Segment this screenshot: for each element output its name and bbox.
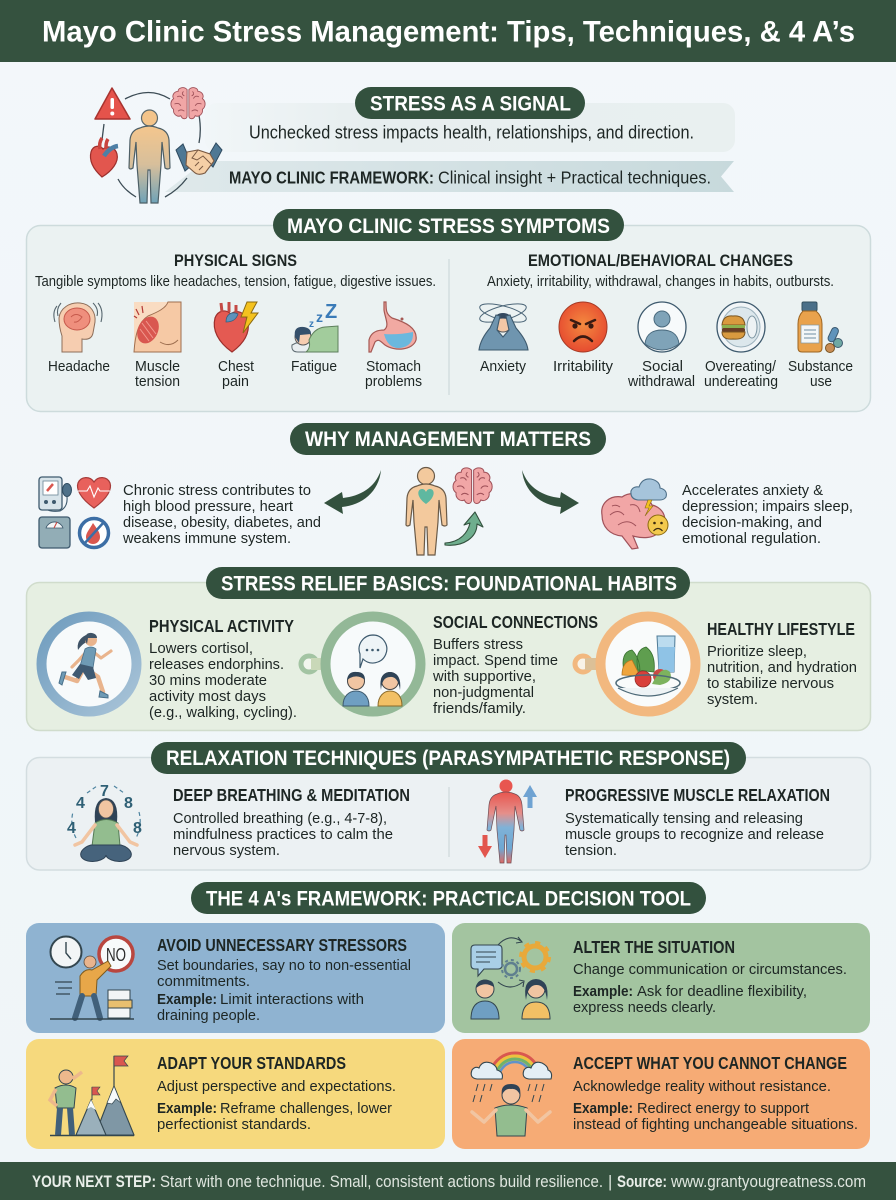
symptom labels: Substance (788, 359, 853, 375)
footer: www.grantyougreatness.com (670, 1173, 866, 1191)
avoid text: commitments. (157, 973, 250, 990)
technique: progressive muscle relaxation: Systematically tensing and releasing (565, 810, 803, 827)
framework ribbon (165, 161, 734, 192)
physical effects text: weakens immune system. (122, 530, 291, 547)
avoid text: draining people. (157, 1007, 260, 1024)
alter text: Ask for deadline flexibility, (637, 983, 807, 1000)
framework text (229, 168, 711, 188)
avoid title: AVOID UNNECESSARY STRESSORS (157, 935, 407, 955)
habit: physical activity (149, 616, 297, 721)
icon: clock, no sign and person (50, 936, 134, 1019)
symptom labels: Overeating/ (705, 359, 777, 375)
icon: heart (90, 138, 118, 177)
habit: healthy lifestyle: to stabilize nervous (707, 675, 834, 692)
footer: YOUR NEXT STEP: (32, 1173, 156, 1191)
title banner: Mayo Clinic Stress Management: Tips, Techniques, & 4 A’s (42, 16, 855, 48)
icon: anxiety (478, 300, 528, 350)
icon: fatigue (292, 301, 338, 352)
habit: physical activity: PHYSICAL ACTIVITY (149, 616, 294, 636)
avoid text: Limit interactions with (220, 991, 364, 1008)
mental effects text: emotional regulation. (682, 530, 821, 547)
alter text: express needs clearly. (573, 999, 716, 1016)
accept text: Example: (573, 1100, 633, 1117)
icon: healthy meal in ring (600, 616, 696, 712)
symptom labels: Social (642, 359, 683, 375)
breath count numbers: 4 (76, 795, 85, 812)
panel: relaxation techniques (26, 742, 870, 870)
icon: stomach (369, 302, 416, 352)
mental effects text (682, 482, 853, 547)
adapt text (157, 1078, 396, 1133)
icon: chest pain (214, 302, 258, 352)
physical effects text (122, 482, 321, 547)
icon: blood pressure monitor (39, 477, 72, 511)
habit: healthy lifestyle: system. (707, 691, 758, 708)
adapt text: perfectionist standards. (157, 1116, 311, 1133)
footer: | (608, 1173, 612, 1191)
technique: deep breathing: nervous system. (173, 842, 280, 859)
icon: rainbow, rain and person (471, 1053, 552, 1136)
habit: physical activity: 30 mins moderate (149, 672, 267, 689)
heading: why management matters (290, 423, 606, 455)
icon: communication and gears (471, 937, 550, 1019)
symptom labels (48, 359, 853, 390)
adapt text: Reframe challenges, lower (220, 1100, 392, 1117)
accept text: Redirect energy to support (637, 1100, 810, 1117)
habit: social connections (432, 612, 598, 717)
heading: symptoms (273, 209, 624, 241)
heading: the 4 a's framework (191, 882, 706, 914)
card: avoid unnecessary stressors (26, 923, 445, 1033)
habit: social connections: impact. Spend time (433, 652, 558, 669)
breath count numbers: 7 (100, 783, 109, 800)
signal message panel (205, 103, 735, 152)
habit: social connections: Buffers stress (433, 636, 523, 653)
alter text: Example: (573, 983, 633, 1000)
icon: person (129, 110, 170, 203)
heading: stress as a signal: STRESS AS A SIGNAL (370, 92, 571, 116)
heading: symptoms: MAYO CLINIC STRESS SYMPTOMS (287, 214, 610, 238)
section: why management matters (39, 423, 853, 555)
icon: muscle relaxation body (478, 780, 537, 863)
connector: to lifestyle ring (575, 656, 598, 672)
icon: brain (453, 468, 492, 503)
accept text: Acknowledge reality without resistance. (573, 1078, 831, 1095)
physical effects text: high blood pressure, heart (123, 498, 294, 515)
icon: overeating (717, 302, 765, 352)
zzz letters (309, 301, 337, 330)
habit: social connections: friends/family. (433, 700, 526, 717)
icon: warning triangle (95, 88, 130, 119)
heading: stress relief basics: STRESS RELIEF BASICS: FOUNDATIONAL HABITS (221, 572, 677, 596)
technique: progressive muscle relaxation: muscle groups to recognize and release (565, 826, 824, 843)
avoid text: Example: (157, 991, 217, 1008)
arrow: to mental effects (522, 470, 579, 514)
sub-panel heading: physical signs: PHYSICAL SIGNS (174, 251, 297, 270)
habit: social connections: non-judgmental (433, 684, 534, 701)
panel: stress relief basics (26, 567, 870, 730)
habit: physical activity: releases endorphins. (149, 656, 284, 673)
adapt title: ADAPT YOUR STANDARDS (157, 1053, 346, 1073)
technique: deep breathing: Controlled breathing (e.g., 4-7-8), (173, 810, 387, 827)
adapt text: Example: (157, 1100, 217, 1117)
heading: relaxation techniques (151, 742, 746, 774)
symptom labels: pain (222, 374, 249, 390)
technique: progressive muscle relaxation: tension. (565, 842, 617, 859)
mental effects text: depression; impairs sleep, (682, 498, 853, 515)
zzz letters: z (316, 309, 323, 325)
accept text: instead of fighting unchangeable situations. (573, 1116, 858, 1133)
symptom labels: Stomach (366, 359, 421, 375)
heading: stress relief basics (206, 567, 690, 599)
habit: healthy lifestyle (707, 619, 857, 708)
icon: brain (171, 88, 205, 119)
technique: progressive muscle relaxation (565, 785, 830, 859)
alter text: Change communication or circumstances. (573, 961, 847, 978)
footer: Source: (617, 1173, 667, 1191)
zzz letters: z (309, 319, 314, 330)
mental effects text: decision-making, and (682, 514, 822, 531)
icon: running person in ring (42, 616, 136, 712)
footer: Start with one technique. Small, consistent actions build resilience. (160, 1173, 603, 1191)
heading: stress as a signal (355, 87, 585, 119)
framework text: Clinical insight + Practical techniques. (438, 168, 711, 188)
breath count numbers (67, 783, 142, 837)
breath count numbers: 8 (133, 820, 142, 837)
habit: healthy lifestyle: HEALTHY LIFESTYLE (707, 619, 855, 639)
heading: why management matters: WHY MANAGEMENT MATTERS (305, 427, 591, 451)
symptom labels: Fatigue (291, 359, 337, 375)
panel: mayo clinic stress symptoms (26, 209, 870, 412)
technique: deep breathing: mindfulness practices to calm the (173, 826, 393, 843)
connector: to social ring (301, 656, 324, 672)
icon: brain with cloud and sad face (602, 479, 668, 549)
icon: weight scale (39, 517, 70, 548)
icon: 4-7-8 meditation (67, 783, 142, 861)
symptom labels: Headache (48, 359, 110, 375)
physical effects text: disease, obesity, diabetes, and (123, 514, 321, 531)
emotional changes description: Anxiety, irritability, withdrawal, changes in habits, outbursts. (487, 274, 834, 290)
avoid text: Set boundaries, say no to non-essential (157, 957, 411, 974)
accept text (573, 1078, 858, 1133)
habit: healthy lifestyle: Prioritize sleep, (707, 643, 807, 660)
icon: heart with ecg (78, 478, 110, 508)
alter title: ALTER THE SITUATION (573, 937, 735, 957)
technique: progressive muscle relaxation: PROGRESSIVE MUSCLE RELAXATION (565, 785, 830, 805)
icon: person with stress signals (90, 88, 222, 203)
arrow: to physical effects (324, 470, 381, 514)
technique: deep breathing: DEEP BREATHING & MEDITATION (173, 785, 410, 805)
mental effects text: Accelerates anxiety & (682, 482, 823, 499)
icon: clock, no sign and person: NO (106, 945, 126, 965)
breath count numbers: 8 (124, 795, 133, 812)
icon: headache (54, 303, 102, 352)
symptom labels: withdrawal (627, 374, 695, 390)
habit: social connections: SOCIAL CONNECTIONS (433, 612, 598, 632)
heading: the 4 a's framework: THE 4 A's FRAMEWORK: PRACTICAL DECISION TOOL (206, 886, 691, 910)
symptom labels: problems (365, 374, 422, 390)
icon: irritability (559, 302, 607, 352)
zzz letters: Z (325, 301, 337, 323)
card: accept what you cannot change (452, 1039, 870, 1149)
habit: physical activity: (e.g., walking, cycling). (149, 704, 297, 721)
physical signs description: Tangible symptoms like headaches, tension, fatigue, digestive issues. (35, 274, 436, 290)
symptom labels: Irritability (553, 359, 614, 375)
icon: blood drop (80, 518, 108, 548)
alter text (573, 961, 847, 1016)
symptom labels: Anxiety (480, 359, 527, 375)
title banner (0, 0, 896, 62)
heading: relaxation techniques: RELAXATION TECHNIQUES (PARASYMPATHETIC RESPONSE) (166, 746, 730, 770)
icon: handshake (176, 143, 222, 174)
icon: substance use (798, 302, 842, 352)
adapt text: Adjust perspective and expectations. (157, 1078, 396, 1095)
card: alter the situation (452, 923, 870, 1033)
technique: deep breathing (173, 785, 410, 859)
panel: stress as a signal (165, 87, 735, 192)
icon: two people talking in ring (326, 616, 420, 712)
card: adapt your standards (26, 1039, 445, 1149)
symptom labels: Chest (218, 359, 254, 375)
accept title: ACCEPT WHAT YOU CANNOT CHANGE (573, 1053, 847, 1073)
symptom labels: Muscle (135, 359, 180, 375)
symptom labels: tension (135, 374, 180, 390)
symptom labels: undereating (704, 374, 778, 390)
habit: social connections: with supportive, (432, 668, 536, 685)
icon: social withdrawal (638, 302, 686, 352)
icon: body with heart (406, 468, 447, 555)
habit: physical activity: activity most days (149, 688, 266, 705)
arrow: body to brain (445, 512, 483, 545)
symptom labels: use (810, 374, 832, 390)
physical effects text: Chronic stress contributes to (123, 482, 311, 499)
footer (0, 1162, 896, 1200)
habit: healthy lifestyle: nutrition, and hydration (707, 659, 857, 676)
breath count numbers: 4 (67, 820, 76, 837)
habit: physical activity: Lowers cortisol, (149, 640, 253, 657)
icon: muscle tension (133, 302, 181, 352)
icon: person viewing mountain flag (50, 1056, 134, 1136)
framework text: MAYO CLINIC FRAMEWORK: (229, 168, 434, 188)
avoid text (157, 957, 411, 1024)
sub-panel heading: emotional changes: EMOTIONAL/BEHAVIORAL CHANGES (528, 251, 793, 270)
signal text: Unchecked stress impacts health, relationships, and direction. (249, 122, 694, 142)
